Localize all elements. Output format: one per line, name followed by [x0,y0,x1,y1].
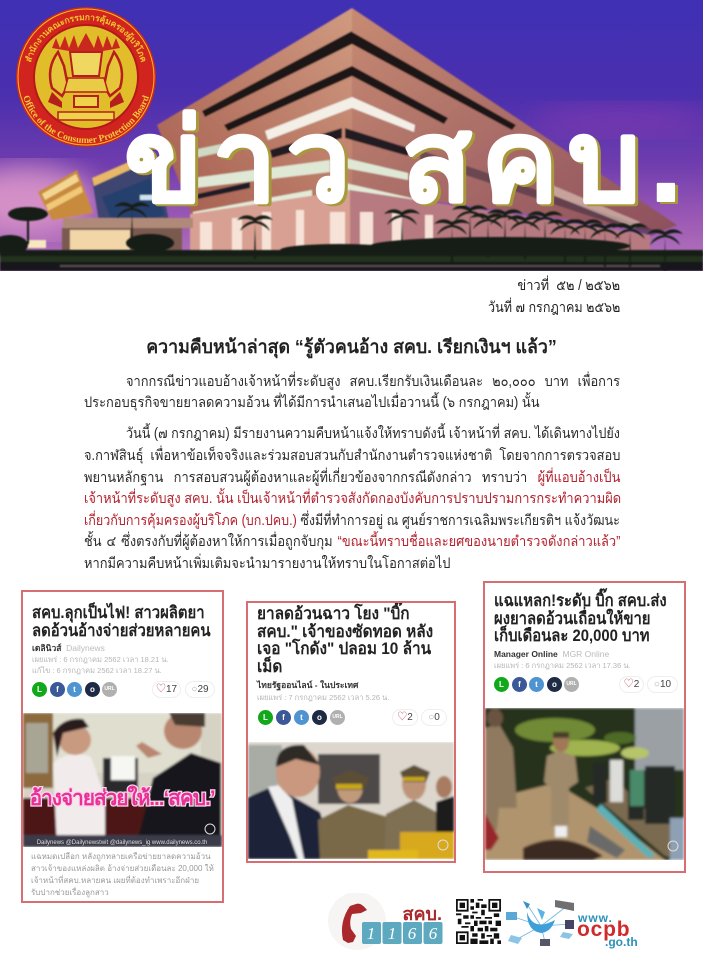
website address: www. [577,911,613,925]
card 1 title [32,602,211,640]
paragraph 1: จากกรณีข่าวแอบอ้างเจ้าหน้าที่ระดับสูง สคบ.เรียกรับเงินเดือนละ ๒๐,๐๐๐ บาท เพื่อการ [126,374,620,390]
card 1 comment count: ○29 [191,684,209,695]
card 2 like count [392,709,418,726]
ground floor [190,190,350,258]
card 2 title: เจอ "โกดัง" ปลอม 10 ล้าน [257,640,431,658]
card 2 date: เผยแพร่ : 7 กรกฎาคม 2562 เวลา 5.26 น. [257,693,389,702]
headline: ความคืบหน้าล่าสุด “รู้ตัวคนอ้าง สคบ. เรียกเงินฯ แล้ว” [146,336,557,357]
card 3 share icons [494,677,579,692]
round office seal [16,7,156,147]
card 1 caption: เจ้าหน้าที่สคบ.หลายคน เผยที่ต้องทำเพราะอีกฝ่าย [31,876,199,885]
card 1 dates: เผยแพร่ : 6 กรกฎาคม 2562 เวลา 18.21 น. [32,655,169,664]
card 3 title: แฉแหลก!ระดับ บิ๊ก สคบ.ส่ง [494,592,667,610]
QR code [456,899,501,944]
card 1 share icons: f [56,685,59,694]
card 3 share icons: L [499,680,504,689]
card 2 share icons: t [300,713,303,722]
card 1 like count [152,681,181,698]
card 1 caption: แฉหมดเปลือก หลังถูกทลายเครือข่ายยาลดความอ้วน [31,852,211,861]
card 1 dates: แก้ไข : 6 กรกฎาคม 2562 เวลา 18.27 น. [32,666,162,675]
card 2 title: ยาลดอ้วนฉาว โยง "บิ๊ก [257,605,410,623]
website address: ocpb [577,918,630,941]
card 1 dates [32,655,169,675]
paragraph 2 with red highlights: จ.กาฬสินธุ์ เพื่อหาข้อเท็จจริงและร่วมสอบสวนกับสำนักงานตำรวจแห่งชาติ โดยจากการตรวจสอบ [84,448,620,464]
round office seal: สำนักงานคณะกรรมการคุ้มครองผู้บริโภค [25,15,146,62]
card 2 share icons: L [263,713,268,722]
paragraph 1: ประกอบธุรกิจขายยาลดความอ้วน ที่ได้มีการนำเสนอไปเมื่อวานนี้ (๖ กรกฎาคม) นั้น [84,395,540,411]
card 3 share icons: t [535,680,538,689]
card 3 title [494,588,667,645]
footer: hotline 1166: 1 [367,924,375,943]
card 3 comment count [647,676,678,693]
website address [577,911,638,949]
news card: Manager Online [483,581,686,873]
paragraph 1 [84,372,620,411]
card 3 photo: officers at dig site [485,708,684,860]
title: ข่าว สคบ.: ข่าว สคบ. [127,100,685,228]
card 1 source: เดลินิวส์ Dailynews [32,643,105,653]
title: ข่าว สคบ.: ข่าว สคบ. [124,98,682,226]
card 1 caption: รับปากช่วยเรื่องลูกสาว [31,888,109,897]
news card: Thai Rath [246,601,456,863]
card 1 share icons: o [90,685,95,694]
paragraph 2 with red highlights [84,423,621,572]
left wing [92,160,170,228]
card 2 source: ไทยรัฐออนไลน์ - ในประเทศ [257,680,358,690]
website address: .go.th [605,935,638,949]
card 3 share icons: o [552,680,557,689]
paragraph 2 with red highlights: เจ้าหน้าที่ระดับสูง สคบ. นั้น เป็นเจ้าหน้าที่ตำรวจสังกัดกองบังคับการปราบปรามการกระทำความผิด [84,491,621,507]
card 2 share icons: f [282,713,285,722]
card 1 caption [31,852,214,898]
footer: hotline 1166: 6 [408,924,417,943]
card 1 title: สคบ.ลุกเป็นไฟ! สาวผลิตยา [32,604,205,622]
card 3 like count [619,676,644,693]
card 3 like count: ♡2 [624,679,639,690]
news number: ข่าวที่ ๕๒ / ๒๕๖๒ [517,278,620,294]
card 2 share icons: o [317,713,322,722]
card 2 title [257,603,433,676]
card 3 source: Manager Online MGR Online [494,649,609,659]
card 2 like count: ♡2 [397,712,413,723]
pavilion [63,218,193,228]
paragraph 2 with red highlights: วันนี้ (๗ กรกฎาคม) มีรายงานความคืบหน้าแจ้งให้ทราบดังนี้ เจ้าหน้าที่ สคบ. ได้เดินทางไปยัง [126,426,620,442]
banner: government complex at dusk [0,0,703,271]
news card: Dailynews [21,590,224,903]
card 2 title: สคบ." เจ้าของซัดทอด หลัง [257,623,433,641]
card 3 title: เก็บเดือนละ 20,000 บาท [494,627,650,645]
footer: hotline 1166 [328,893,442,950]
card 2 comment count [421,709,447,726]
card 2 title: เม็ด [257,658,282,676]
palm trees and shrubs [0,202,703,273]
card 1 comment count [185,681,215,698]
card 3 title: ผงยาลดอ้วนเถื่อนให้ขาย [494,610,651,628]
paragraph 2 with red highlights: ชั้น ๔ ซึ่งตรงกับที่ผู้ต้องหาให้การเมื่อถูกจับกุม “ขณะนี้ทราบชื่อและยศของนายตำรวจดังกล่าวแล้ว” [84,534,620,550]
news date: วันที่ ๗ กรกฎาคม ๒๕๖๒ [488,300,620,316]
card 2 comment count: ○0 [428,712,440,723]
card 1 share icons: t [73,685,76,694]
card 1 share icons: L [37,685,42,694]
card 1 title: ลดอ้วนอ้างจ่ายส่วยหลายคน [32,622,211,640]
card 3 share icons: f [518,680,521,689]
card 3 comment count: ○10 [654,679,671,690]
paragraph 2 with red highlights: พยานหลักฐาน การสอบสวนผู้ต้องหาและผู้ที่เกี่ยวข้องจากกรณีดังกล่าว ทราบว่า ผู้ที่แอบอ้างเป็น [84,470,620,486]
card 1 share icons [32,682,117,697]
paragraph 2 with red highlights: หากมีความคืบหน้าเพิ่มเติมจะนำมารายงานให้ทราบในโอกาสต่อไป [84,556,450,572]
ground and water [0,253,703,262]
card 2 share icons: URL [332,714,343,720]
card 1 photo: woman and man holding paper [23,713,222,847]
card 1 caption: สาวเจ้าของแหล่งผลิต อ้างจ่ายส่วยเดือนละ 20,000 ให้ [31,864,214,873]
footer: hotline 1166: 1 [388,924,396,943]
card 1 share icons: URL [104,686,115,692]
paragraph 2 with red highlights: เกี่ยวกับการคุ้มครองผู้บริโภค (บก.ปคบ.) ซึ่งมีที่ทำการอยู่ ณ ศูนย์ราชการเฉลิมพระเกียรติฯ แจ้งวัฒนะ [84,513,620,529]
round office seal: Office of the Consumer Protection Board [24,95,149,143]
card 2 photo: officers inspecting boxes [248,742,454,859]
footer: hotline 1166: 6 [429,924,438,943]
card 1 photo: woman and man holding paper: Dailynews @Dailynewstwit @dailynews_ig www.dailynews.co.th [37,840,207,846]
footer: hotline 1166: สคบ. [403,904,442,924]
card 1 photo: woman and man holding paper: อ้างจ่ายส่วยให้...‘สคบ.’ [30,785,216,810]
card 1 like count: ♡17 [156,684,177,695]
network graphic [506,900,574,946]
card 3 share icons: URL [566,681,577,687]
card 2 share icons [258,710,345,725]
card 3 date: เผยแพร่ : 6 กรกฎาคม 2562 เวลา 17.36 น. [494,661,631,670]
